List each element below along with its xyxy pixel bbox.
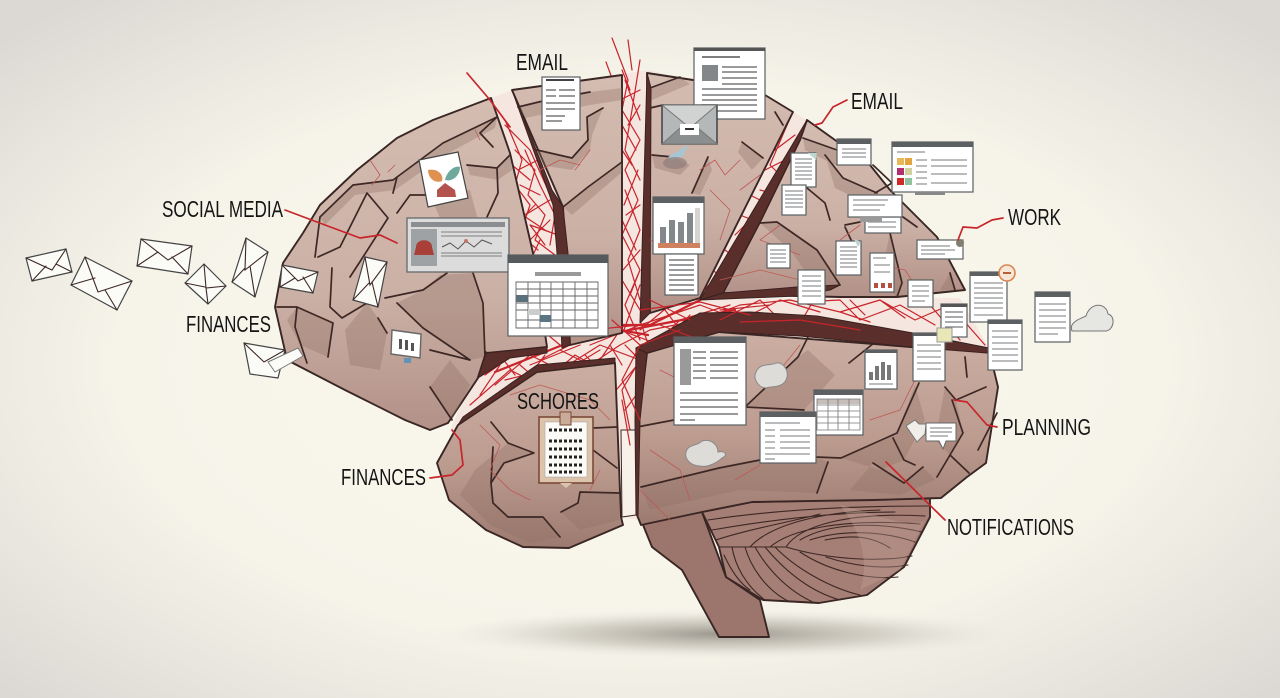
doc: [767, 244, 790, 268]
badge: [999, 265, 1015, 281]
floating envelopes: [26, 238, 387, 378]
doc: [865, 217, 901, 233]
leader: work: [958, 218, 1003, 240]
label: work: WORK: [1008, 204, 1061, 230]
leader lines: [285, 73, 1003, 520]
speech note: [917, 239, 964, 259]
doc: [941, 304, 967, 337]
label: social media: SOCIAL MEDIA: [162, 196, 283, 222]
temporal left: [437, 363, 623, 548]
doc chart: [865, 350, 897, 389]
brainstem: [641, 512, 769, 637]
cloud puff: [686, 440, 725, 466]
gap underlay: [450, 70, 990, 520]
small doc: [391, 330, 421, 363]
leader: email right: [815, 100, 847, 125]
fissures: [458, 73, 989, 515]
cloud puff: [755, 363, 787, 388]
leader: planning: [954, 400, 997, 427]
label: email: EMAIL: [516, 49, 568, 75]
label: finances bottom: FINANCES: [341, 464, 426, 490]
red network: [470, 38, 985, 430]
white strip: [621, 430, 636, 517]
left lobe: [275, 98, 547, 430]
red overlay: [530, 295, 860, 445]
doc: [1035, 292, 1070, 342]
envelope: [137, 239, 192, 274]
doc table: [814, 390, 863, 435]
temporal right: [637, 332, 998, 525]
label: finances left: FINANCES: [186, 311, 271, 337]
envelope: [280, 265, 318, 293]
envelope: centre: [662, 105, 717, 169]
brain: [275, 38, 998, 637]
card: logo: [419, 152, 468, 207]
shadows: [287, 117, 512, 420]
doc: [908, 280, 933, 307]
clipboard: [539, 412, 593, 488]
envelope: [232, 238, 268, 297]
window: bar chart: [653, 197, 704, 254]
doc large: [674, 337, 746, 425]
documents: [391, 48, 1113, 488]
doc: [791, 153, 817, 187]
envelope: [353, 257, 387, 307]
thin cracks: [370, 130, 915, 520]
folds: [277, 117, 510, 420]
cerebellum: [702, 498, 930, 603]
cloud: [1071, 305, 1113, 331]
doc: email top left: [542, 77, 580, 130]
label: schores: SCHORES: [517, 388, 599, 414]
doc: [798, 270, 825, 304]
doc: [970, 272, 1007, 322]
envelope: [26, 249, 72, 281]
doc: [988, 320, 1022, 370]
doc: [665, 254, 698, 295]
doc: [870, 253, 894, 292]
ground shadow: [435, 609, 1015, 659]
top right lobe: [647, 73, 793, 313]
right lobe: [723, 120, 965, 297]
doc: [836, 239, 861, 275]
doc: [782, 185, 806, 215]
leader: notifications: [886, 462, 945, 520]
window: palette: [892, 142, 973, 195]
window: calendar: [508, 255, 608, 336]
doc: [913, 328, 952, 381]
label: planning: PLANNING: [1002, 414, 1091, 440]
envelope: [71, 257, 132, 310]
envelope: [185, 264, 226, 304]
doc: top: [694, 48, 765, 119]
envelope: [244, 343, 303, 378]
leader: social media: [285, 210, 397, 243]
doc: [760, 412, 816, 463]
speech icon: [906, 420, 956, 449]
leader: email top: [467, 73, 510, 127]
label: email right: EMAIL: [851, 88, 903, 114]
top left lobe: [512, 75, 622, 345]
leader: finances: [430, 430, 463, 478]
window: [837, 139, 871, 165]
labels: [162, 49, 1091, 540]
doc: [848, 195, 902, 222]
label: notifications: NOTIFICATIONS: [947, 514, 1074, 540]
window: chart: [407, 218, 509, 272]
